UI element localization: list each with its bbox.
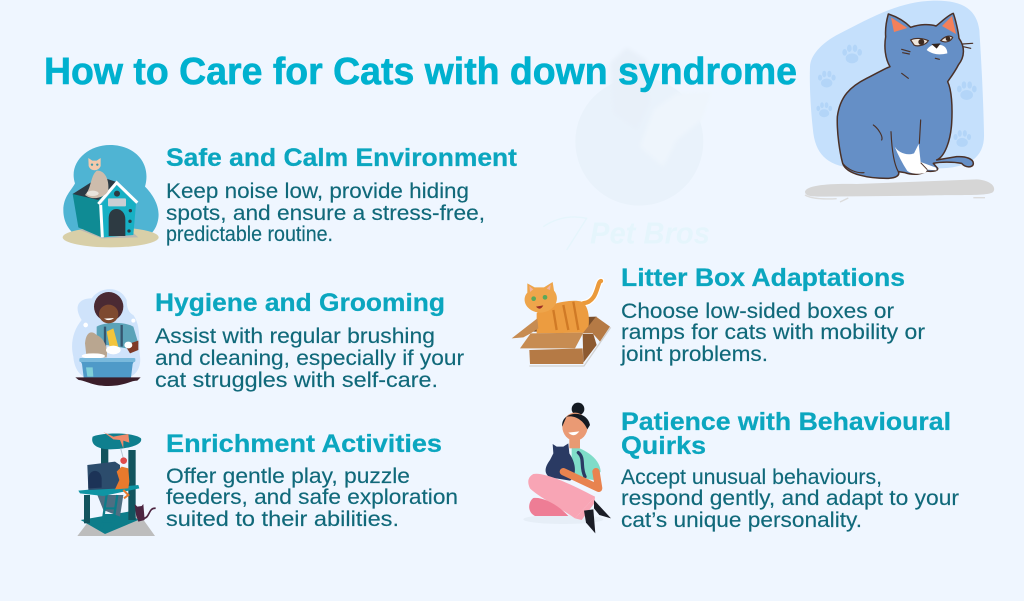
icon: person bathing a cat — [72, 289, 141, 386]
heading: Enrichment Activities — [166, 430, 442, 458]
description: Keep noise low, provide hiding — [166, 179, 469, 203]
description: cat struggles with self-care. — [155, 368, 438, 392]
watermark: The Pet Bros logo: Pet Bros — [590, 216, 710, 250]
heading: Quirks — [621, 432, 706, 460]
heading: Hygiene and Grooming — [155, 289, 445, 317]
description: predictable routine. — [166, 222, 333, 246]
description: suited to their abilities. — [166, 507, 399, 531]
icon: cat tree with cats — [77, 432, 156, 536]
description: cat’s unique personality. — [621, 508, 862, 532]
heading: Safe and Calm Environment — [166, 144, 518, 172]
heading: Patience with Behavioural — [621, 408, 951, 436]
description — [166, 179, 485, 246]
heading — [621, 408, 951, 460]
description — [155, 324, 464, 392]
icon: orange cat in a cardboard box — [512, 281, 611, 366]
description — [166, 464, 458, 531]
icon: woman holding a dark cat — [523, 403, 611, 533]
title: How to Care for Cats with down syndrome — [44, 51, 797, 93]
icon: cat on a teal house — [63, 145, 159, 247]
description — [621, 465, 959, 532]
item: Patience with Behavioural Quirks — [523, 403, 959, 533]
item: Litter Box Adaptations — [512, 264, 925, 366]
description: spots, and ensure a stress-free, — [166, 201, 485, 225]
description: feeders, and safe exploration — [166, 485, 458, 509]
heading: Litter Box Adaptations — [621, 264, 905, 292]
description: Choose low-sided boxes or — [621, 299, 894, 323]
description: Offer gentle play, puzzle — [166, 464, 410, 488]
description: joint problems. — [620, 342, 768, 366]
description: respond gently, and adapt to your — [621, 486, 959, 510]
description: and cleaning, especially if your — [155, 346, 464, 370]
description: Accept unusual behaviours, — [621, 465, 882, 489]
watermark: The Pet Bros logo — [543, 47, 712, 250]
description — [620, 299, 925, 366]
description: Assist with regular brushing — [155, 324, 435, 348]
illustration: grumpy blue cat — [805, 1, 994, 202]
description: ramps for cats with mobility or — [621, 320, 925, 344]
item: Enrichment Activities — [77, 430, 458, 536]
item: Safe and Calm Environment — [63, 144, 518, 247]
item: Hygiene and Grooming — [72, 289, 464, 392]
